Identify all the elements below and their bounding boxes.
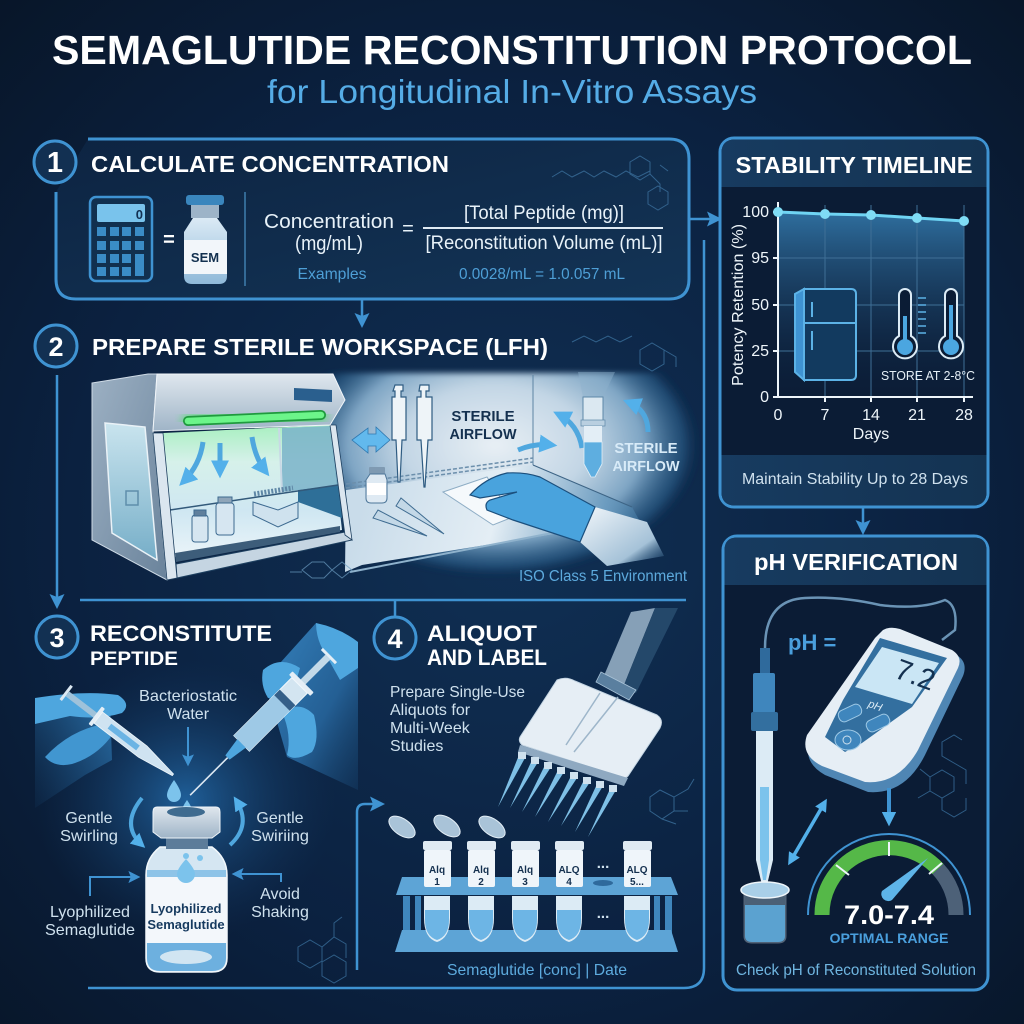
- pH gauge: OPTIMAL RANGE: [830, 930, 948, 946]
- label: avoid shaking: Shaking: [251, 904, 309, 921]
- line chart: potency retention: Days: [853, 426, 889, 443]
- centrifuge tube: [578, 372, 615, 477]
- connector lines and flow arrows: [57, 219, 863, 988]
- tube 4: ALQ: [558, 865, 580, 876]
- vial label text: Semaglutide: [147, 917, 225, 932]
- icon: calculator: 0: [136, 207, 143, 222]
- molecule decoration: [572, 336, 676, 371]
- label: bacteriostatic water: Water: [167, 706, 210, 723]
- left gloved hand: [35, 693, 126, 808]
- label: gentle swirling left: Swirling: [60, 828, 118, 845]
- right gloved hand: [262, 623, 358, 790]
- arrow: water down: [187, 727, 189, 764]
- label: sterile airflow 2: STERILE: [614, 440, 678, 457]
- airflow arrows inside hood: [183, 437, 266, 482]
- molecule decoration: [650, 779, 694, 824]
- tube 3: [511, 841, 540, 942]
- label: sterile airflow 2: AIRFLOW: [612, 458, 680, 475]
- molecule decoration: [290, 562, 352, 578]
- caption: semaglutide conc date: Semaglutide [conc] | Date: [447, 962, 627, 979]
- tube 3: Alq: [517, 865, 533, 876]
- tube rack: [395, 877, 678, 952]
- bench surface: [345, 458, 650, 572]
- heading: aliquot and label: AND LABEL: [427, 645, 547, 670]
- line chart: potency retention: 7: [821, 407, 830, 424]
- label: lyophilized semaglutide: Semaglutide: [45, 922, 135, 939]
- workspace glow and back wall: [330, 368, 694, 573]
- formula: =: [402, 218, 414, 240]
- label: bacteriostatic water: [139, 688, 237, 723]
- tube 3: 3: [522, 877, 528, 888]
- step number 1: [34, 141, 76, 183]
- heading: stability timeline: STABILITY TIMELINE: [736, 152, 972, 178]
- vial glow: [36, 660, 336, 940]
- tube 4: 4: [566, 877, 572, 888]
- ellipsis markers: ...: [597, 905, 609, 922]
- label: sterile airflow 1: STERILE: [451, 408, 515, 425]
- subtitle: for Longitudinal In-Vitro Assays: [267, 73, 757, 110]
- icon: refrigerator: [795, 289, 856, 380]
- probe cable: [765, 598, 956, 648]
- tube 5: ALQ: [626, 865, 648, 876]
- arrow: to vial left: [90, 877, 138, 896]
- formula: Concentration: [264, 211, 394, 233]
- tube 5: 5...: [630, 877, 644, 888]
- double arrow: [352, 427, 390, 453]
- label: pH equals: pH =: [788, 630, 836, 655]
- hood vials and box: [192, 497, 298, 542]
- vial on bench: [366, 467, 387, 503]
- double arrow: [790, 802, 825, 862]
- arrow: meter to gauge: [887, 788, 891, 822]
- panel: step 4 aliquot and label: [374, 608, 694, 979]
- line chart: potency retention: [730, 202, 973, 443]
- swirl arrows: [131, 798, 243, 845]
- heading: reconstitute peptide: RECONSTITUTE: [90, 621, 272, 646]
- vial: lyophilized semaglutide: [146, 807, 227, 972]
- heading: reconstitute peptide: [90, 621, 272, 670]
- step number 3: 3: [49, 623, 65, 653]
- heading: reconstitute peptide: PEPTIDE: [90, 649, 178, 670]
- line chart: potency retention: 50: [751, 297, 769, 314]
- wipe: [443, 477, 513, 525]
- label: lyophilized semaglutide: [45, 904, 135, 939]
- formula: (mg/mL): [295, 233, 363, 255]
- molecule decoration: [552, 156, 668, 210]
- heading: calculate concentration: CALCULATE CONCENTRATION: [91, 151, 449, 177]
- vial label text: Lyophilized: [150, 901, 222, 916]
- examples: Examples: [298, 266, 366, 283]
- description: Multi-Week: [390, 720, 471, 737]
- examples: 0.0028/mL = 1.0.057 mL: [459, 266, 625, 283]
- laminar flow hood: [92, 374, 352, 580]
- label: lyophilized semaglutide: Lyophilized: [50, 904, 130, 921]
- line chart: potency retention: 100: [742, 204, 769, 221]
- caption: check pH: Check pH of Reconstituted Solution: [736, 962, 976, 979]
- ellipsis markers: ...: [597, 855, 609, 872]
- arrow: to vial right: [234, 874, 281, 882]
- tube caps: [385, 811, 509, 842]
- description: [390, 684, 525, 755]
- pipettes: [392, 385, 432, 487]
- vial label text: [147, 901, 225, 932]
- label: sterile airflow 2: [612, 440, 680, 475]
- panel: step 2 sterile workspace: [35, 313, 700, 585]
- ellipsis markers: [593, 855, 613, 922]
- line chart: potency retention: 14: [862, 407, 880, 424]
- pH meter: pH: [865, 698, 884, 714]
- line chart: potency retention: 25: [751, 343, 769, 360]
- right syringe: [179, 644, 341, 806]
- step number 4: 4: [387, 624, 403, 654]
- label: store at 2-8C: STORE AT 2-8°C: [881, 369, 975, 383]
- heading: prepare sterile workspace: PREPARE STERILE WORKSPACE (LFH): [92, 334, 548, 360]
- tube 2: Alq: [473, 865, 489, 876]
- line chart: potency retention: 21: [908, 407, 926, 424]
- pipette tips: [498, 755, 616, 837]
- multichannel pipette: [498, 608, 678, 837]
- pH meter: 7.2: [891, 654, 939, 697]
- panel: pH verification: [723, 536, 988, 990]
- formula: [Total Peptide (mg)]: [464, 203, 624, 224]
- pH probe: [751, 648, 778, 885]
- label: sterile airflow 1: [450, 408, 517, 443]
- title: SEMAGLUTIDE RECONSTITUTION PROTOCOL: [52, 27, 972, 73]
- line chart: potency retention: 0: [774, 407, 783, 424]
- examples: [298, 266, 625, 283]
- tube 4: [555, 841, 584, 942]
- tube 1: [423, 841, 452, 942]
- beaker: [741, 882, 789, 943]
- step number 2: 2: [48, 332, 64, 362]
- panel: step 3 reconstitute peptide: [35, 616, 358, 983]
- caption: maintain stability: Maintain Stability Up to 28 Days: [742, 471, 968, 488]
- description: Prepare Single-Use: [390, 684, 525, 701]
- label: sterile airflow 1: AIRFLOW: [450, 426, 517, 443]
- heading: pH verification: pH VERIFICATION: [754, 549, 958, 575]
- pH gauge: 7.0-7.4: [844, 900, 934, 930]
- description: Studies: [390, 738, 443, 755]
- label: bacteriostatic water: Bacteriostatic: [139, 688, 237, 705]
- label: gentle swirling right: [251, 810, 309, 845]
- label: gentle swirling left: Gentle: [65, 810, 113, 827]
- label: gentle swirling left: [60, 810, 118, 845]
- heading: aliquot and label: [427, 621, 547, 670]
- line chart: potency retention: Potency Retention (%): [730, 224, 747, 386]
- formula: [264, 203, 663, 255]
- step number 2: [35, 325, 77, 367]
- icon: calculator: [90, 197, 152, 281]
- line chart: potency retention: 28: [955, 407, 973, 424]
- divider: [244, 192, 246, 286]
- left syringe: [58, 683, 180, 784]
- water drops: [167, 780, 192, 816]
- panel: stability timeline: [720, 138, 988, 507]
- icon: SEM vial: [184, 195, 227, 284]
- icon: thermometers: [893, 289, 963, 358]
- pipette tips: [373, 498, 444, 536]
- back wall corner: [532, 375, 534, 465]
- tube 5: [623, 841, 652, 942]
- equals sign: =: [163, 229, 175, 251]
- tube 1: Alq: [429, 865, 445, 876]
- label: gentle swirling right: Swiriing: [251, 828, 309, 845]
- lab coat sleeve: [580, 507, 664, 566]
- label: avoid shaking: Avoid: [260, 886, 300, 903]
- hexagon decoration: [298, 917, 346, 983]
- icon: SEM vial: SEM: [191, 250, 219, 265]
- description: Aliquots for: [390, 702, 471, 719]
- tube 2: [467, 841, 496, 942]
- caption: ISO class 5: ISO Class 5 Environment: [519, 568, 688, 585]
- step number 1: 1: [47, 147, 63, 179]
- label: avoid shaking: [251, 886, 309, 921]
- sterile airflow arrows: [518, 402, 648, 450]
- step number 3: [36, 616, 78, 658]
- pH meter: [805, 628, 965, 792]
- tube 2: 2: [478, 877, 484, 888]
- hexagon decoration: [918, 735, 966, 817]
- formula: [Reconstitution Volume (mL)]: [426, 233, 662, 254]
- step number 4: [374, 617, 416, 659]
- pH gauge: [808, 834, 970, 946]
- line chart: potency retention: 95: [751, 250, 769, 267]
- panel: step 1 calculate concentration: [34, 139, 689, 299]
- gloved hand: [470, 473, 595, 542]
- line chart: potency retention: 0: [760, 389, 769, 406]
- heading: aliquot and label: ALIQUOT: [427, 621, 538, 646]
- tube 1: 1: [434, 877, 440, 888]
- label: gentle swirling right: Gentle: [256, 810, 304, 827]
